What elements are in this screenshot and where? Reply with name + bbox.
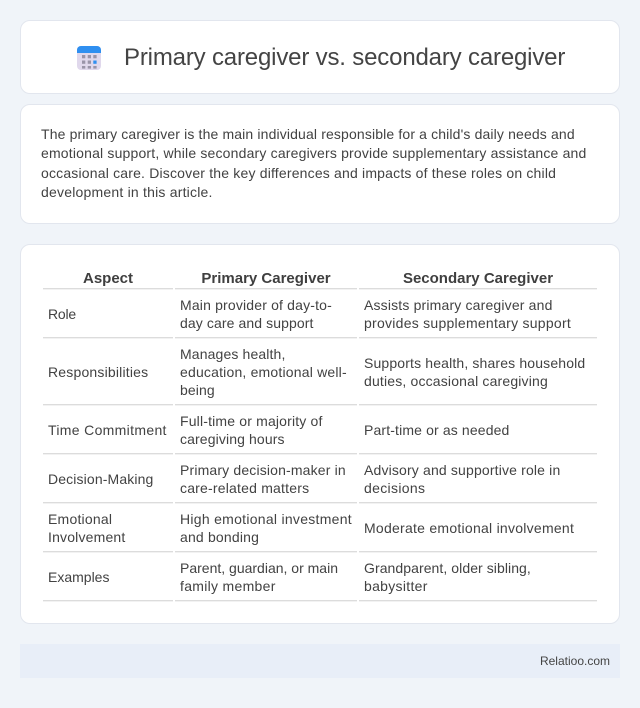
row: emotional involvement: Moderate emotional involvement bbox=[364, 520, 574, 536]
row: responsibilities: Responsibilities bbox=[48, 364, 148, 380]
footer bar bbox=[20, 644, 620, 678]
row: examples: Parent, guardian, or main bbox=[180, 560, 338, 576]
row: responsibilities: being bbox=[180, 382, 215, 398]
row: decision-making: decisions bbox=[364, 480, 425, 496]
row: time commitment: Time Commitment bbox=[48, 422, 167, 438]
row: decision-making: Primary decision-maker in bbox=[180, 462, 346, 478]
row: decision-making: care-related matters bbox=[180, 480, 309, 496]
row: role: Main provider of day-to- bbox=[180, 297, 332, 313]
row: time commitment: caregiving hours bbox=[180, 431, 285, 447]
intro text: development in this article. bbox=[41, 184, 213, 200]
row: examples: Grandparent, older sibling, bbox=[364, 560, 531, 576]
row: responsibilities: Manages health, bbox=[180, 346, 285, 362]
table header: Secondary Caregiver bbox=[403, 270, 553, 287]
row: decision-making: Decision-Making bbox=[48, 471, 153, 487]
icon: calendar bbox=[77, 46, 101, 70]
title: Primary caregiver vs. secondary caregiver bbox=[124, 44, 565, 71]
row: time commitment: Full-time or majority of bbox=[180, 413, 323, 429]
row: role: Assists primary caregiver and bbox=[364, 297, 553, 313]
row: emotional involvement: Emotional bbox=[48, 511, 112, 527]
row: role: Role bbox=[48, 306, 76, 322]
panel: comparison table bbox=[20, 244, 620, 624]
table header: Aspect bbox=[83, 270, 133, 287]
panel: title card bbox=[20, 20, 620, 94]
row: emotional involvement: and bonding bbox=[180, 529, 259, 545]
row: role: day care and support bbox=[180, 315, 314, 331]
row: examples: babysitter bbox=[364, 578, 428, 594]
row: emotional involvement: Involvement bbox=[48, 529, 125, 545]
intro text: The primary caregiver is the main individual responsible for a child's daily needs and bbox=[41, 126, 575, 142]
footer credit: Relatioo.com bbox=[540, 654, 610, 668]
row: responsibilities: education, emotional well- bbox=[180, 364, 347, 380]
row: decision-making: Advisory and supportive role in bbox=[364, 462, 560, 478]
row: role: provides supplementary support bbox=[364, 315, 571, 331]
row: examples: family member bbox=[180, 578, 276, 594]
row: responsibilities: duties, occasional caregiving bbox=[364, 373, 548, 389]
row: examples: Examples bbox=[48, 569, 109, 585]
row: responsibilities: Supports health, shares household bbox=[364, 355, 585, 371]
intro text: occasional care. Discover the key differences and impacts of these roles on child bbox=[41, 165, 556, 181]
panel: introduction bbox=[20, 104, 620, 224]
intro text bbox=[41, 126, 586, 200]
intro text: emotional support, while secondary caregivers provide supplementary assistance and bbox=[41, 145, 586, 161]
table header: Primary Caregiver bbox=[201, 270, 331, 287]
row: emotional involvement: High emotional investment bbox=[180, 511, 352, 527]
row: time commitment: Part-time or as needed bbox=[364, 422, 510, 438]
